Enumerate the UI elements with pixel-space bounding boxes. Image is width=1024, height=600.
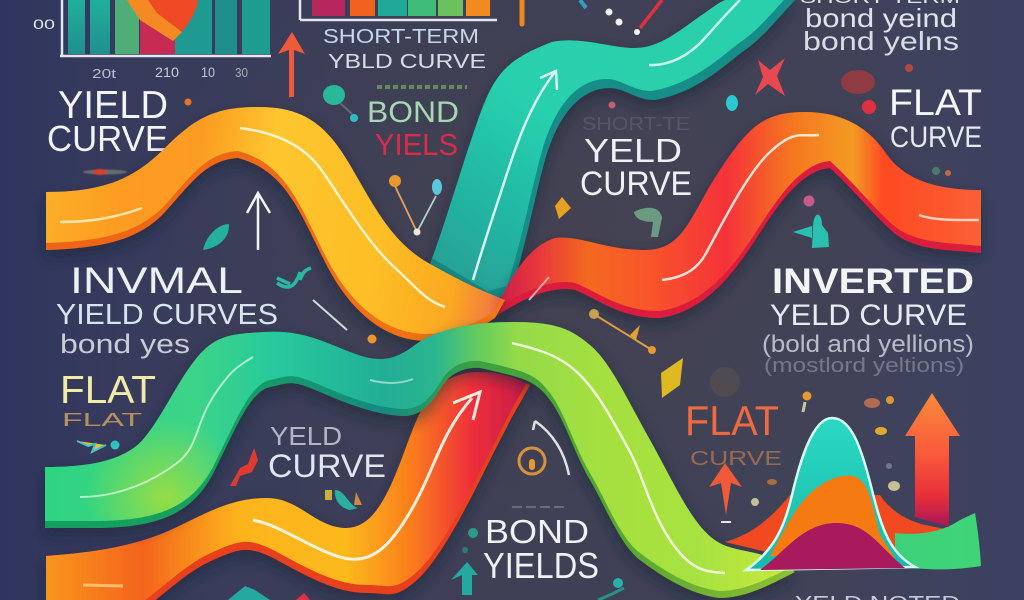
highlight: yellow line (240, 128, 445, 307)
icon: red smear (83, 169, 127, 175)
heading: invmal: INVMAL (70, 260, 243, 301)
highlight: green line (80, 357, 253, 497)
wave: crimson (760, 523, 905, 570)
arrow: big gradient up (905, 393, 960, 527)
icon: red heart (862, 100, 876, 114)
icon: squiggle under flat (77, 440, 120, 452)
icon: dashes above bond (377, 85, 467, 89)
label: faint short-term: SHORT-TE (582, 114, 690, 134)
label: short-term: SHORT-TERM (323, 26, 479, 48)
arrow: white up (247, 193, 270, 250)
icon: teal cactus (793, 215, 829, 248)
label: flat small: FLAT (62, 410, 142, 430)
axis label: 00: 00 (33, 16, 55, 32)
wave: teal bell (746, 418, 915, 570)
bar chart: top left (60, 0, 271, 56)
label: yield curves: YIELD CURVES (56, 299, 278, 331)
label: curve small: CURVE (268, 448, 386, 484)
label: bond yelns: bond yelns (803, 26, 959, 56)
label: mostlord yeltions: (mostlord yeltions) (764, 355, 964, 377)
icon: ring centre (529, 459, 535, 470)
arrow: curved white (533, 421, 569, 475)
ribbon: yellow orange normal (46, 100, 505, 341)
icon: red figure (230, 448, 258, 486)
icon: red dotted blob (841, 70, 875, 94)
icon: teal leaf (203, 224, 229, 250)
icon: v chart (389, 175, 442, 236)
icon: dotted patch (710, 367, 740, 397)
axis label: 10: 10 (201, 64, 215, 80)
highlight: teal upper line (649, 0, 740, 65)
heading: inverted: INVERTED (772, 262, 974, 301)
axis label: 210: 210 (155, 64, 179, 80)
heading: yield centre: YELD (584, 132, 682, 169)
label: bond yes: bond yes (60, 329, 190, 359)
icon: small dots (721, 392, 900, 522)
icon: yellow line with dots (589, 309, 656, 354)
ribbon: orange bottom (46, 364, 530, 600)
ribbon: teal (427, 0, 795, 300)
heading: curve centre: CURVE (580, 165, 692, 203)
icon: pink blob (804, 196, 814, 206)
label: yeld small: YELD (270, 421, 342, 451)
icon: teal olive blob (634, 208, 662, 237)
highlight: red right line (919, 215, 979, 220)
faint dashes (512, 506, 568, 508)
highlight: lime line (512, 343, 725, 573)
highlight: left line (60, 208, 142, 222)
icon: mixed blobs (325, 490, 362, 510)
icon: pink dot (608, 102, 616, 108)
label: bond and yellions: (bold and yellions) (762, 331, 974, 358)
icon: yellow diamond (555, 197, 571, 219)
bar chart: top centre (300, 0, 497, 20)
highlight: red left line (529, 277, 549, 300)
highlight: lower left line (83, 585, 123, 586)
icon: red cross (755, 58, 785, 96)
icon: teal blob with dot (323, 85, 358, 122)
icon: orange dot (184, 98, 192, 106)
icon: red dot (905, 64, 913, 72)
icon: ring (519, 448, 545, 474)
label: bond yeind: bond yeind (805, 3, 957, 33)
label: yield curve: YBLD CURVE (328, 51, 486, 73)
ribbon: red orange inverted (490, 105, 981, 320)
icon: yellow diamond right (661, 358, 683, 398)
ribbon: green lime (45, 315, 795, 598)
icon: teal sprout (277, 268, 311, 287)
chart: bell curve (725, 418, 981, 570)
icon: white line with dot (313, 300, 376, 344)
highlight: teal arrow line (473, 71, 557, 280)
label: yields: YIELS (375, 127, 458, 162)
icon: teal dot bottom (598, 578, 624, 600)
wave: back red (725, 495, 950, 560)
heading: curve: CURVE (47, 118, 168, 159)
icon: teal up arrow (451, 528, 478, 595)
axis label: 20t: 20t (92, 66, 117, 81)
label: curve faint: CURVE (690, 448, 782, 470)
icon: top centre marks (522, 0, 662, 35)
heading: flat left: FLAT (60, 369, 156, 412)
highlight: teal short line (370, 379, 413, 383)
wave: orange (770, 476, 895, 558)
icon: faint blobs (932, 167, 951, 176)
heading: yield curve: YIELD (58, 84, 168, 127)
axis label: 30: 30 (235, 65, 248, 80)
heading: flat orange: FLAT (685, 397, 779, 444)
label: curve right: CURVE (890, 121, 982, 154)
highlight: arrow line (253, 392, 480, 559)
label: bond: BOND (367, 96, 459, 129)
icon: teal bottom marks (228, 586, 310, 600)
arrow: orange up (278, 32, 305, 97)
heading: flat curve right: FLAT (889, 82, 982, 123)
icon: teal drop (726, 95, 738, 111)
highlight: red line (662, 135, 819, 280)
heading: bond: BOND (485, 513, 589, 550)
label: yield curve inverted: YELD CURVE (770, 299, 967, 332)
icon: red small up arrow (709, 463, 742, 515)
wave: green base (895, 513, 981, 569)
heading: yields: YIELDS (483, 545, 599, 586)
